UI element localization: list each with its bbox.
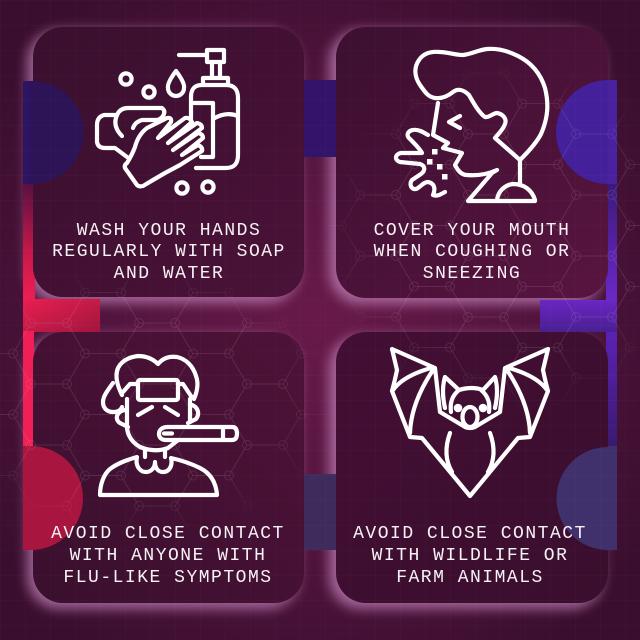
card background [33, 27, 304, 297]
slate edge right bottom [606, 446, 617, 550]
panel: wash hands [32, 27, 304, 297]
text: wash hands: AND WATER [114, 264, 224, 284]
text: avoid contact wildlife: FARM ANIMALS [396, 568, 544, 588]
red half circle left edge [23, 446, 34, 550]
panel: avoid contact with wildlife [336, 332, 608, 603]
panel: avoid contact with anyone [31, 332, 304, 603]
blue block top middle [304, 80, 336, 157]
text: wash hands: REGULARLY WITH SOAP [52, 242, 286, 262]
purple strip right [606, 184, 617, 300]
text: cover mouth: WHEN COUGHING OR [374, 242, 570, 262]
text: cover mouth: SNEEZING [423, 264, 521, 284]
red strip lower left [23, 331, 34, 447]
text: avoid contact anyone: WITH ANYONE WITH [70, 546, 266, 566]
text: avoid contact anyone: AVOID CLOSE CONTACT [51, 524, 285, 544]
slate half circle [556, 447, 608, 550]
panel: cover mouth [336, 27, 608, 298]
text: wash hands: WASH YOUR HANDS [77, 221, 261, 241]
text: avoid contact anyone: FLU-LIKE SYMPTOMS [63, 568, 273, 588]
hexagon network left [0, 276, 316, 524]
blue half circle left [23, 81, 33, 184]
slate block bottom middle [304, 474, 336, 550]
text: avoid contact wildlife: WITH WILDLIFE OR [372, 546, 568, 566]
red strip upper left [23, 184, 35, 300]
text: cover mouth: COVER YOUR MOUTH [374, 221, 570, 241]
icon: coughing person [396, 49, 547, 201]
icon: sick person with thermometer [100, 356, 237, 495]
red half circle [31, 446, 83, 550]
blue half circle [32, 81, 84, 184]
purple half circle [556, 80, 608, 184]
red block left [23, 299, 100, 332]
purple strip right lower [606, 332, 617, 447]
purple block right [540, 300, 617, 332]
hexagon network right [342, 76, 640, 395]
card background [336, 332, 608, 603]
card background [336, 27, 608, 298]
card background [33, 332, 304, 603]
purple edge top right [606, 80, 617, 184]
icon: soap and hands [97, 50, 238, 194]
text: avoid contact wildlife: AVOID CLOSE CONTACT [353, 524, 587, 544]
icon: bat [392, 349, 548, 496]
